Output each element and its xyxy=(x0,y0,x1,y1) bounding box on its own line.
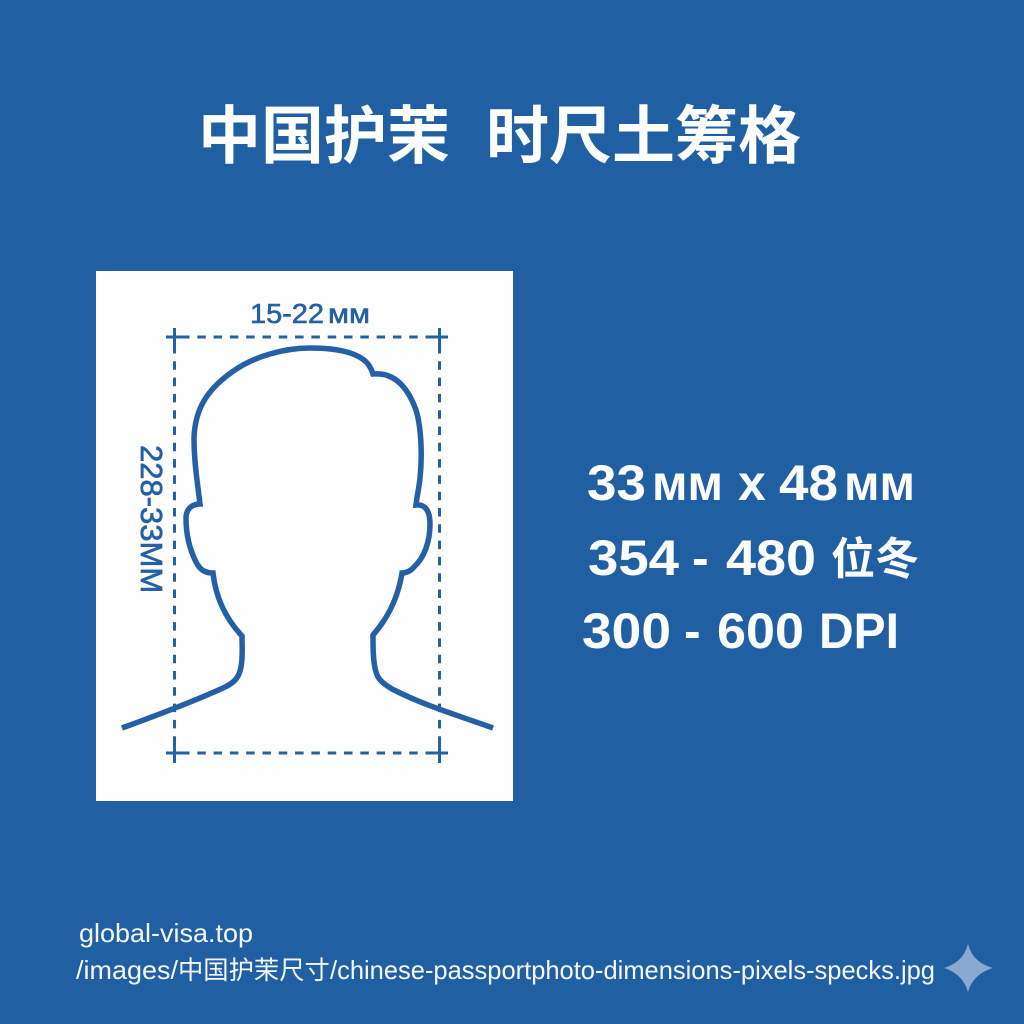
title xyxy=(198,86,801,177)
head and shoulders silhouette xyxy=(122,348,493,728)
resolution: 600 xyxy=(717,603,804,659)
resolution xyxy=(582,603,899,659)
url line 1: global-visa.top xyxy=(79,918,253,948)
pixel size xyxy=(588,530,919,586)
url line 2: 中国护茉尺寸 xyxy=(178,957,330,985)
print size: 48 xyxy=(779,455,838,511)
label: head height: 228-33MM xyxy=(134,445,169,593)
print size: мм xyxy=(652,455,723,511)
pixel size: 位冬 xyxy=(831,535,919,584)
label: head width: 15-22 xyxy=(250,298,324,329)
specifications xyxy=(582,455,919,659)
title: 时尺土筹格 xyxy=(486,86,801,177)
pixel size: - xyxy=(692,530,709,586)
resolution: DPI xyxy=(819,603,899,659)
url line 2: /chinese-passportphoto-dimensions-pixels-specks.jpg xyxy=(330,955,935,985)
print size xyxy=(587,455,915,511)
pixel size: 480 xyxy=(726,530,816,586)
icon: sparkle xyxy=(944,944,993,992)
url line 2 xyxy=(76,955,935,985)
panel: passport photo xyxy=(96,271,513,801)
resolution: 300 xyxy=(582,603,671,659)
label: head width: мм xyxy=(328,298,370,329)
label: head width xyxy=(250,298,370,329)
resolution: - xyxy=(684,603,701,659)
source url xyxy=(76,918,935,985)
print size: x xyxy=(738,455,766,511)
pixel size: 354 xyxy=(588,530,679,586)
print size: 33 xyxy=(587,455,646,511)
url line 2: /images/ xyxy=(76,955,179,985)
dashed measurement frame xyxy=(166,328,448,763)
print size: мм xyxy=(844,455,915,511)
title: 中国护茉 xyxy=(198,86,450,177)
